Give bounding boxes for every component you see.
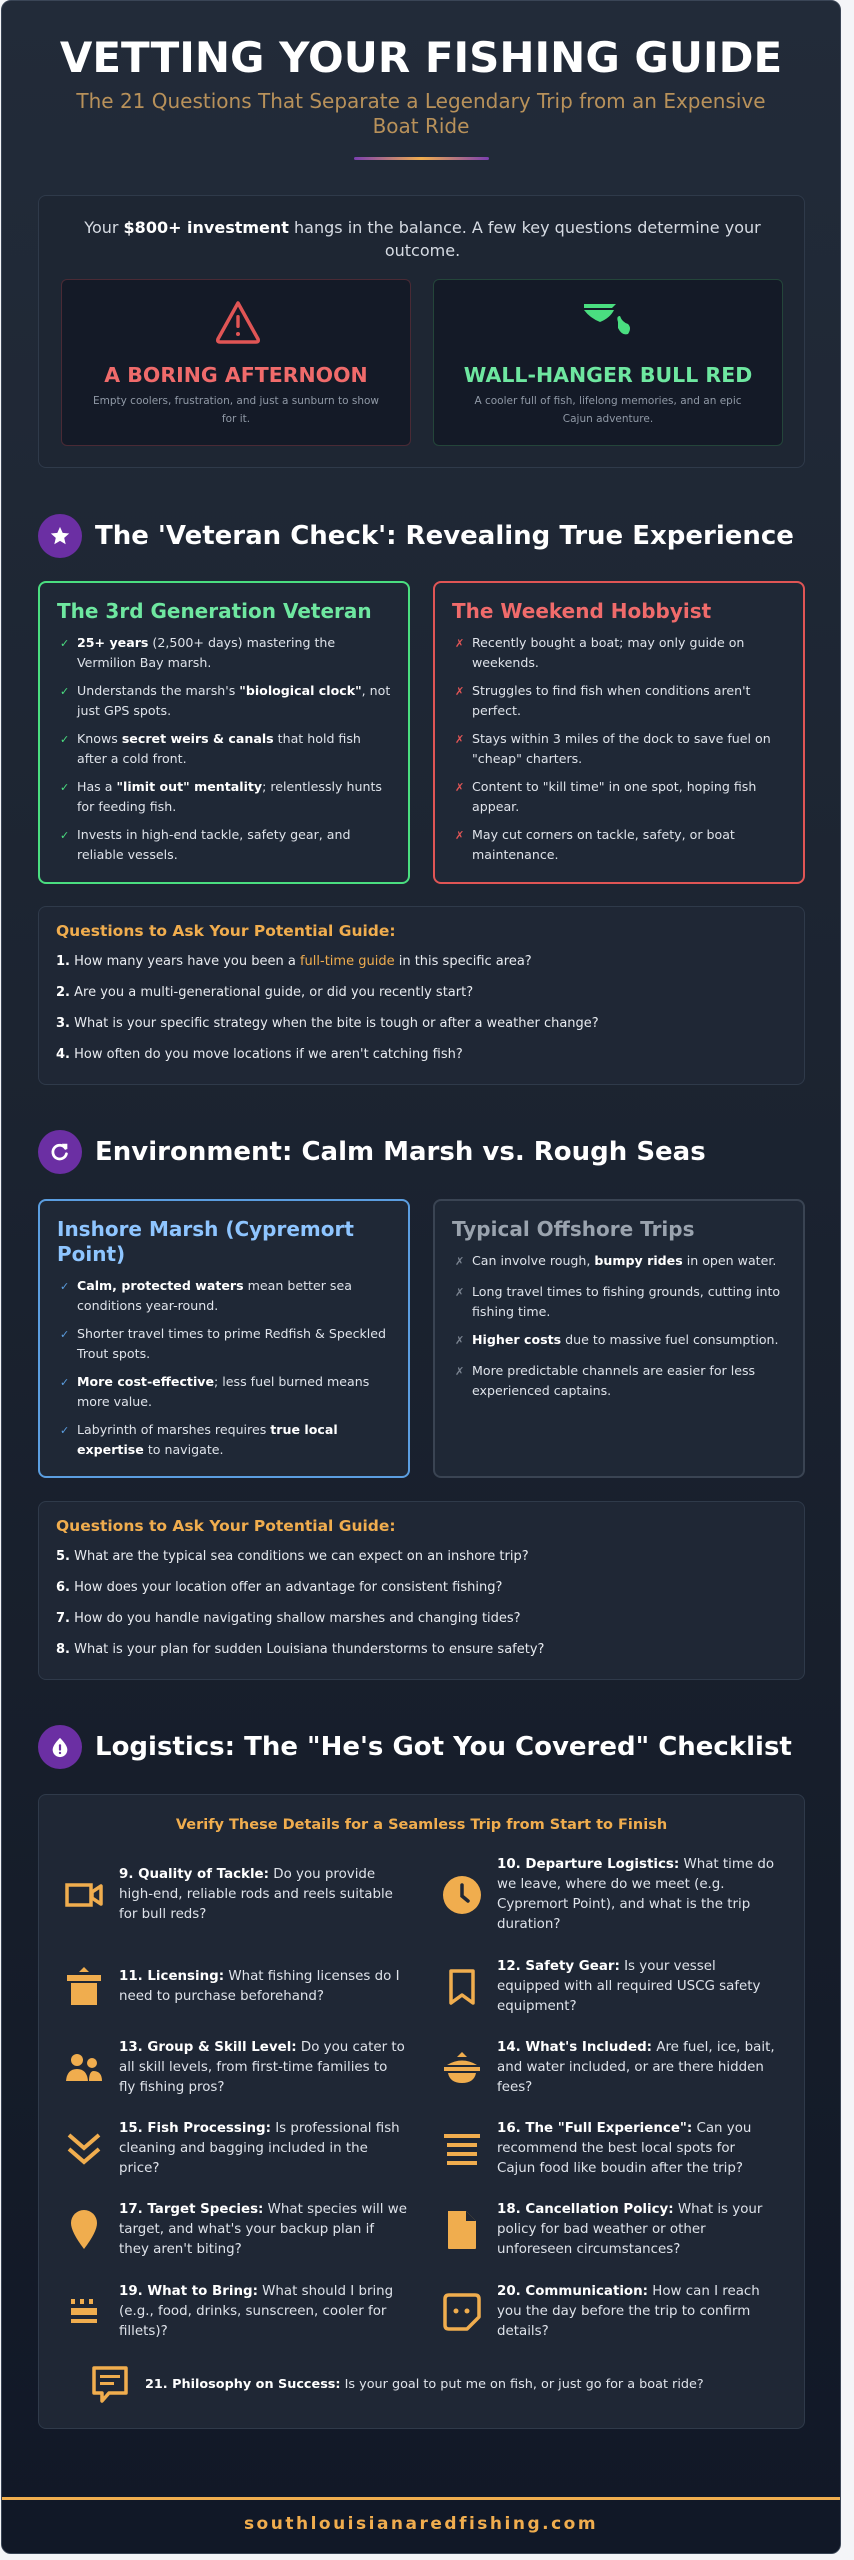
panel: questions 5-8: 7. How do you handle navigating shallow marshes and changing tides?: [56, 1611, 521, 1626]
card: bull red: [433, 279, 783, 446]
panel: offshore: Can involve rough, bumpy rides in open water.: [472, 1253, 776, 1268]
section header: environment: [38, 1130, 706, 1174]
panel: questions 1-4: [38, 906, 805, 1085]
panel: hobbyist: ✗: [455, 733, 464, 746]
panel: offshore: Higher costs due to massive fuel consumption.: [472, 1332, 779, 1347]
item 16: 16. The "Full Experience": Can you recommend the best local spots for Cajun food like boudin after the trip?: [497, 2121, 751, 2176]
panel: inshore marsh: Inshore Marsh (Cypremort Point): [57, 1217, 354, 1266]
icon: refresh: [38, 1130, 82, 1174]
panel: offshore: More predictable channels are easier for less experienced captains.: [472, 1363, 755, 1398]
panel: hobbyist: ✗: [455, 781, 464, 794]
panel: questions 1-4: 4. How often do you move locations if we aren't catching fish?: [56, 1047, 463, 1062]
panel: inshore marsh: ✓: [60, 1280, 69, 1293]
panel: inshore marsh: Shorter travel times to prime Redfish & Speckled Trout spots.: [77, 1326, 386, 1361]
panel: questions 1-4: 2. Are you a multi-generational guide, or did you recently start?: [56, 985, 473, 1000]
panel: hobbyist: ✗: [455, 637, 464, 650]
footer url: southlouisianaredfishing.com: [244, 2514, 598, 2534]
item 10: 10. Departure Logistics: What time do we leave, where do we meet (e.g. Cypremort Point), and what is the trip duration?: [497, 1857, 774, 1932]
gradient divider: [354, 157, 489, 160]
item 20: 20. Communication: How can I reach you the day before the trip to confirm details?: [497, 2284, 760, 2339]
panel: hobbyist: The Weekend Hobbyist: [452, 599, 711, 623]
section header: veteran check: [38, 514, 794, 558]
panel: questions 5-8: 8. What is your plan for sudden Louisiana thunderstorms to ensure safety?: [56, 1642, 544, 1657]
section header: environment: Environment: Calm Marsh vs. Rough Seas: [95, 1137, 706, 1167]
panel: hobbyist: [433, 581, 805, 884]
panel: inshore marsh: ✓: [60, 1424, 69, 1437]
icon: star: [38, 514, 82, 558]
panel: veteran: The 3rd Generation Veteran: [57, 599, 372, 623]
item 11: 11. Licensing: What fishing licenses do I need to purchase beforehand?: [119, 1969, 400, 2004]
panel: veteran: Knows secret weirs & canals that hold fish after a cold front.: [77, 731, 361, 766]
panel: inshore marsh: [38, 1199, 410, 1478]
item 13: 13. Group & Skill Level: Do you cater to all skill levels, from first-time families to fly fishing pros?: [119, 2040, 405, 2095]
panel: inshore marsh: ✓: [60, 1376, 69, 1389]
panel: offshore: Typical Offshore Trips: [452, 1217, 695, 1241]
description: A cooler full of fish, lifelong memories, and an epic Cajun adventure.: [474, 395, 742, 425]
intro text: Your $800+ investment hangs in the balance. A few key questions determine your outcome.: [84, 218, 761, 260]
panel: hobbyist: May cut corners on tackle, safety, or boat maintenance.: [472, 827, 735, 862]
panel: questions 5-8: 6. How does your location offer an advantage for consistent fishing?: [56, 1580, 502, 1595]
title: VETTING YOUR FISHING GUIDE: [60, 33, 782, 82]
panel: questions 1-4: 1. How many years have you been a full-time guide in this specific area?: [56, 954, 532, 969]
panel: veteran: ✓: [60, 733, 69, 746]
panel: veteran: ✓: [60, 829, 69, 842]
panel: inshore marsh: More cost-effective; less fuel burned means more value.: [77, 1374, 369, 1409]
panel: inshore marsh: Labyrinth of marshes requires true local expertise to navigate.: [77, 1422, 338, 1457]
panel: offshore: ✗: [455, 1255, 464, 1268]
panel: offshore: ✗: [455, 1365, 464, 1378]
item 14: 14. What's Included: Are fuel, ice, bait, and water included, or are there hidden fees?: [497, 2040, 775, 2095]
panel: questions 5-8: Questions to Ask Your Potential Guide:: [56, 1517, 396, 1535]
icon: fish: [584, 304, 630, 334]
item 21: [92, 2366, 704, 2403]
panel: veteran: [38, 581, 410, 884]
panel: hobbyist: Struggles to find fish when conditions aren't perfect.: [472, 683, 750, 718]
panel: veteran: Understands the marsh's "biological clock", not just GPS spots.: [77, 683, 390, 718]
panel: offshore: ✗: [455, 1286, 464, 1299]
panel: questions 1-4: Questions to Ask Your Potential Guide:: [56, 922, 396, 940]
section header: logistics: [38, 1725, 792, 1769]
item 21: 21. Philosophy on Success: Is your goal to put me on fish, or just go for a boat ride?: [145, 2377, 704, 2392]
item 9: 9. Quality of Tackle: Do you provide high-end, reliable rods and reels suitable for bull reds?: [119, 1867, 393, 1922]
panel: offshore: [433, 1199, 805, 1478]
item 12: 12. Safety Gear: Is your vessel equipped with all required USCG safety equipment?: [497, 1959, 760, 2014]
card: boring afternoon: [61, 279, 411, 446]
description: Empty coolers, frustration, and just a sunburn to show for it.: [93, 395, 379, 425]
panel: hobbyist: Recently bought a boat; may only guide on weekends.: [472, 635, 744, 670]
panel: logistics checklist: [38, 1794, 805, 2429]
panel: inshore marsh: Calm, protected waters mean better sea conditions year-round.: [77, 1278, 352, 1313]
panel: veteran: ✓: [60, 685, 69, 698]
panel: offshore: Long travel times to fishing grounds, cutting into fishing time.: [472, 1284, 780, 1319]
panel: questions 5-8: [38, 1501, 805, 1680]
icon: alert drop: [38, 1725, 82, 1769]
heading: WALL-HANGER BULL RED: [464, 363, 752, 387]
panel: veteran: Invests in high-end tackle, safety gear, and reliable vessels.: [77, 827, 350, 862]
panel: inshore marsh: ✓: [60, 1328, 69, 1341]
footer: [2, 2497, 840, 2555]
panel: hobbyist: Content to "kill time" in one spot, hoping fish appear.: [472, 779, 756, 814]
item 15: 15. Fish Processing: Is professional fish cleaning and bagging included in the price?: [119, 2121, 400, 2176]
panel: veteran: ✓: [60, 781, 69, 794]
heading: A BORING AFTERNOON: [104, 363, 368, 387]
panel: hobbyist: ✗: [455, 829, 464, 842]
panel: questions 1-4: 3. What is your specific strategy when the bite is tough or after a weather change?: [56, 1016, 599, 1031]
panel: hobbyist: Stays within 3 miles of the dock to save fuel on "cheap" charters.: [472, 731, 771, 766]
subtitle: The 21 Questions That Separate a Legendary Trip from an Expensive Boat Ride: [76, 89, 766, 138]
item 19: 19. What to Bring: What should I bring (e.g., food, drinks, sunscreen, cooler for fillets)?: [119, 2284, 393, 2339]
panel: veteran: Has a "limit out" mentality; relentlessly hunts for feeding fish.: [77, 779, 382, 814]
panel: offshore: ✗: [455, 1334, 464, 1347]
section header: veteran check: The 'Veteran Check': Revealing True Experience: [95, 521, 794, 551]
panel: questions 5-8: 5. What are the typical sea conditions we can expect on an inshore trip?: [56, 1549, 529, 1564]
panel: veteran: 25+ years (2,500+ days) mastering the Vermilion Bay marsh.: [77, 635, 335, 670]
panel: hobbyist: ✗: [455, 685, 464, 698]
panel: veteran: ✓: [60, 637, 69, 650]
panel: intro: [38, 195, 805, 468]
checklist heading: Verify These Details for a Seamless Trip from Start to Finish: [176, 1817, 667, 1833]
icon: warning: [216, 301, 260, 344]
item 18: 18. Cancellation Policy: What is your policy for bad weather or other unforeseen circumstances?: [497, 2202, 762, 2257]
item 17: 17. Target Species: What species will we target, and what's your backup plan if they aren't biting?: [119, 2202, 407, 2257]
section header: logistics: Logistics: The "He's Got You Covered" Checklist: [95, 1732, 792, 1762]
